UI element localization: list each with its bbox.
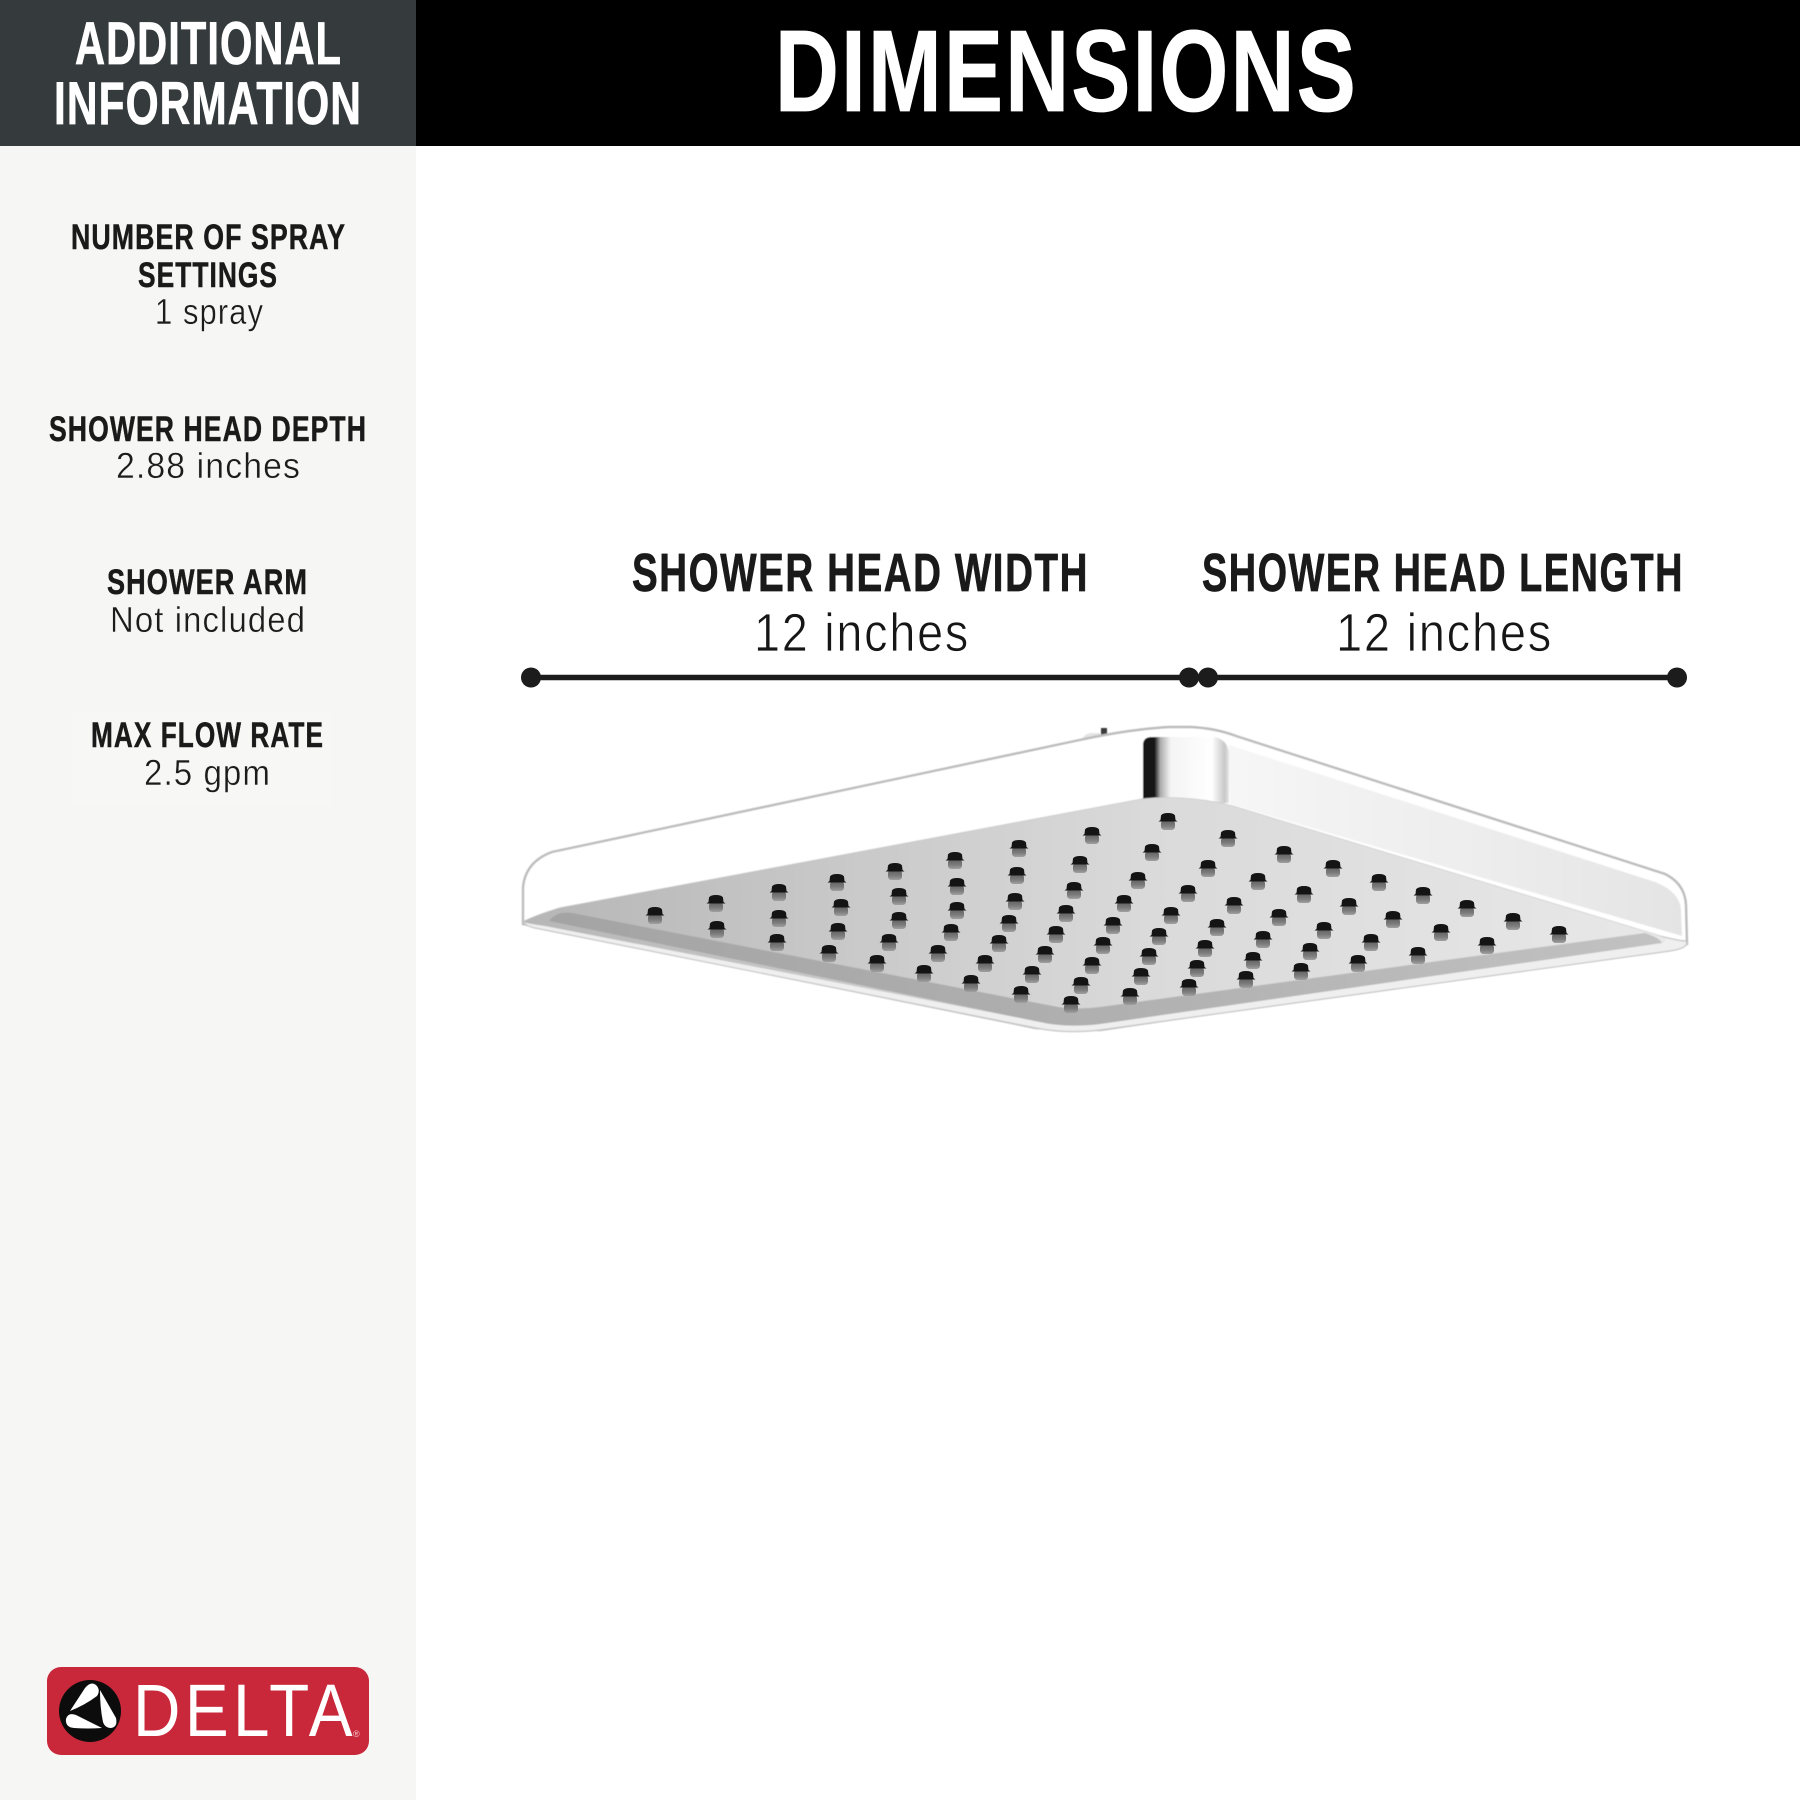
- Delta logo: DELTA: [133, 1669, 357, 1752]
- dimension: shower head length: [1198, 543, 1687, 688]
- spec: shower head depth: SHOWER HEAD DEPTH: [49, 410, 367, 449]
- Delta logo: [47, 1667, 369, 1755]
- dimension: shower head width: 12 inches: [754, 603, 970, 663]
- nozzles: [646, 813, 1568, 1013]
- dimension: shower head width: [521, 543, 1199, 688]
- spec: shower arm: Not included: [110, 599, 306, 640]
- spec: shower head depth: [49, 410, 367, 486]
- sidebar header: ADDITIONAL: [75, 10, 342, 77]
- sidebar header: [0, 0, 416, 146]
- spec: max flow rate: [91, 716, 324, 793]
- spec: number of spray settings: NUMBER OF SPRAY: [71, 218, 346, 257]
- Delta logo: ®: [353, 1729, 360, 1739]
- sidebar header: INFORMATION: [54, 70, 362, 137]
- title bar: dimensions: DIMENSIONS: [775, 6, 1358, 136]
- spec: max flow rate: MAX FLOW RATE: [91, 716, 324, 755]
- panel: additional information sidebar: [0, 0, 416, 1800]
- dimension: shower head length: 12 inches: [1336, 603, 1553, 663]
- spec: shower arm: [107, 563, 308, 640]
- illustration: shower head: [523, 727, 1687, 1032]
- title bar: dimensions: [416, 0, 1800, 146]
- spec: max flow rate: 2.5 gpm: [144, 752, 271, 793]
- dimension: shower head width: SHOWER HEAD WIDTH: [632, 543, 1089, 603]
- spec: shower head depth: 2.88 inches: [116, 445, 301, 486]
- head shell and spray face: [523, 727, 1687, 1032]
- spec: number of spray settings: SETTINGS: [138, 256, 278, 295]
- spec: number of spray settings: 1 spray: [155, 291, 264, 332]
- spec: shower arm: SHOWER ARM: [107, 563, 308, 602]
- spec: number of spray settings: [71, 218, 346, 332]
